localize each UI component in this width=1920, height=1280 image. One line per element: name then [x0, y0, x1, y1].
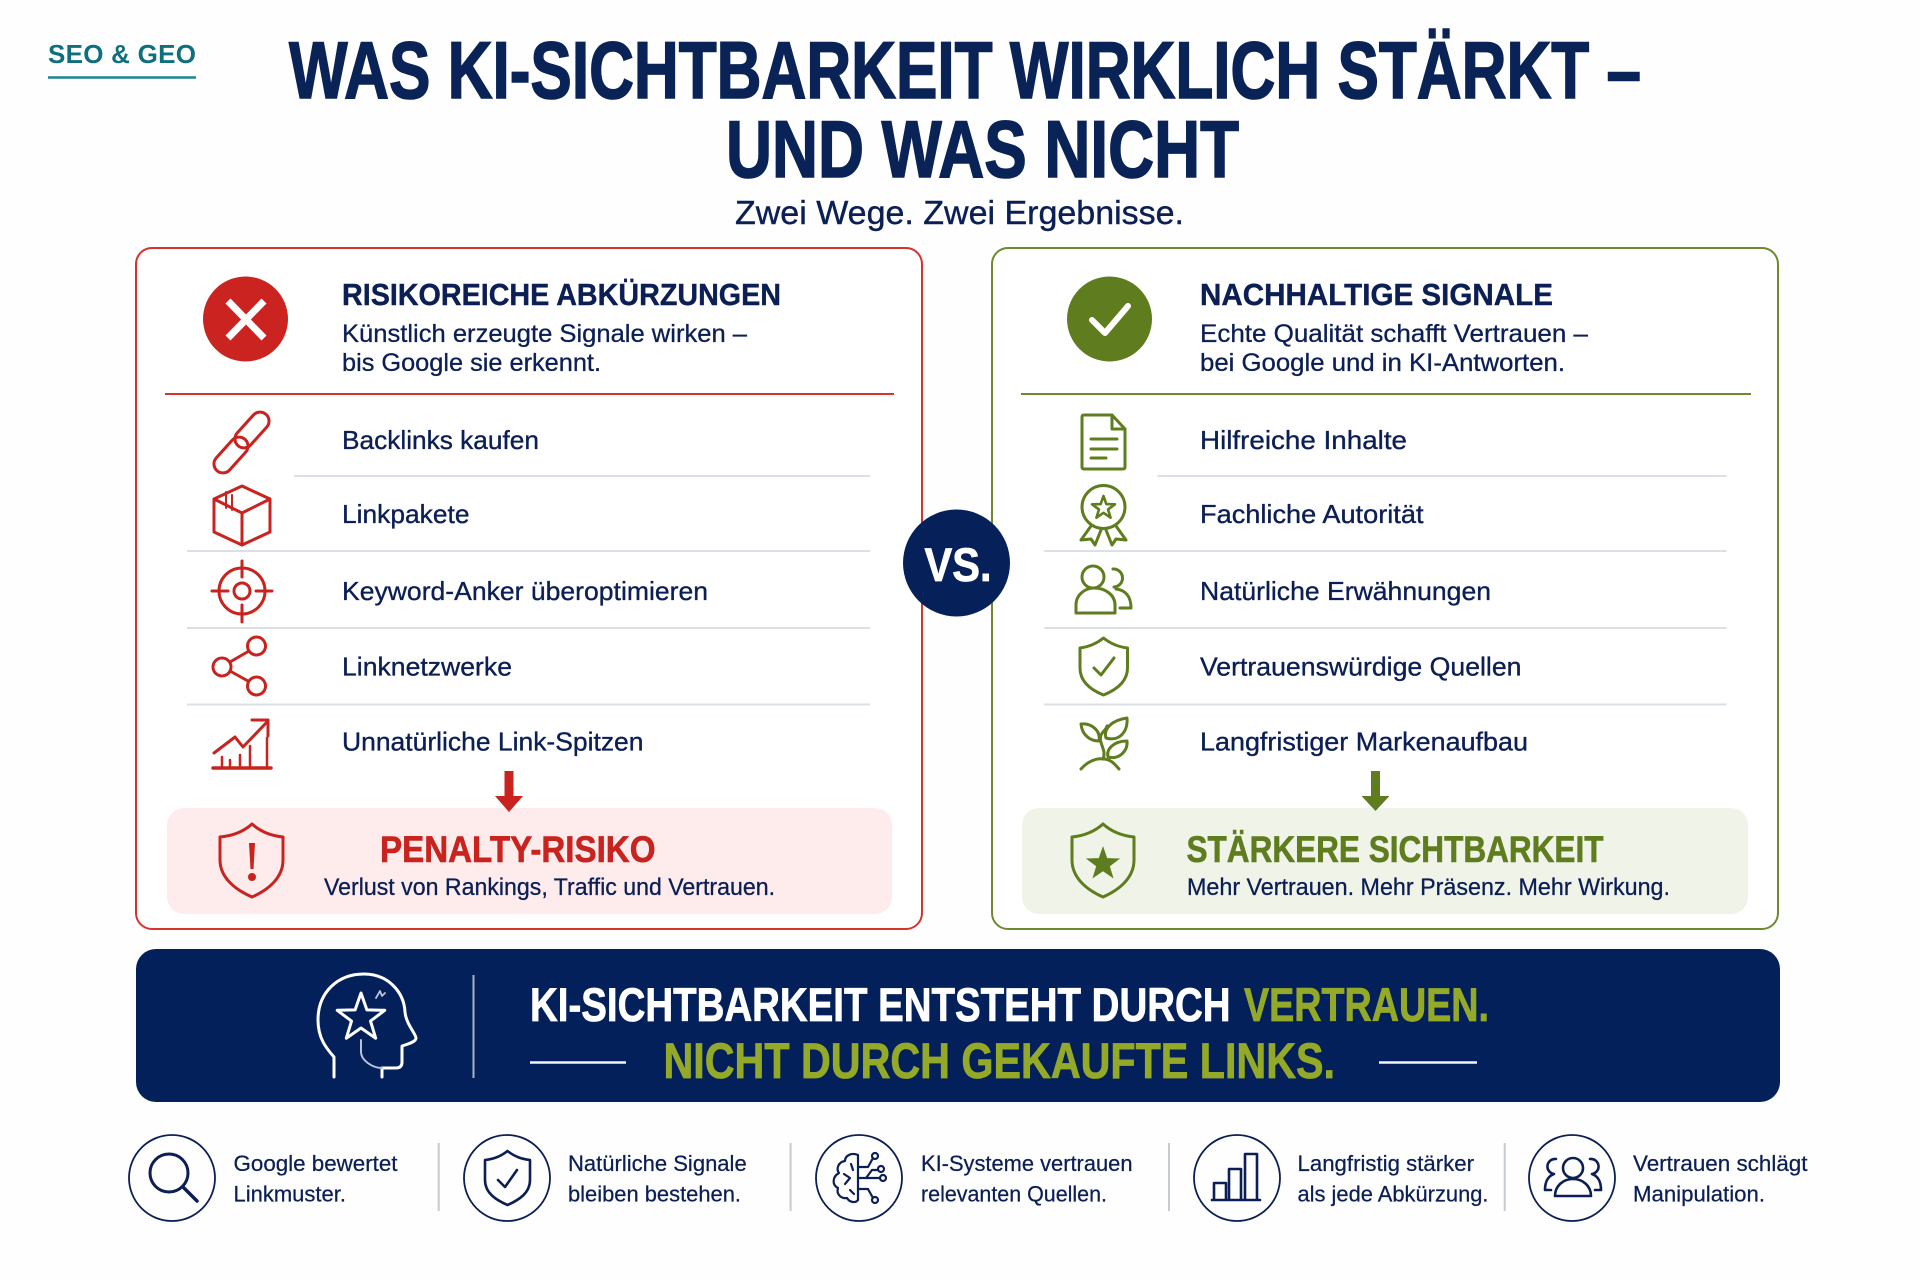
- icon: red cross circle: [203, 276, 288, 362]
- icon: head with star: [318, 974, 416, 1077]
- icon: group of people: [1529, 1135, 1615, 1221]
- takeaway: Langfristig stärker als jede Abkürzung: Langfristig stärker: [1298, 1151, 1474, 1176]
- list item: Langfristiger Markenaufbau: Langfristiger Markenaufbau: [1200, 726, 1528, 756]
- panel description: sustainable signals: bei Google und in KI-Antworten.: [1200, 349, 1565, 377]
- brand tag: SEO & GEO: SEO & GEO: [48, 39, 196, 69]
- icon: spike chart: [213, 720, 271, 768]
- list item: Linkpakete: Linkpakete: [342, 499, 470, 529]
- takeaway: Vertrauen schlägt Manipulation: [1529, 1135, 1808, 1221]
- list item: Keyword-Anker: Keyword-Anker überoptimieren: [342, 576, 708, 606]
- arrow: to stronger visibility: [1362, 771, 1390, 811]
- list item: Fachliche Autorität: Fachliche Autorität: [1200, 499, 1424, 529]
- list item: Backlinks kaufen: Backlinks kaufen: [342, 425, 539, 455]
- panel description: sustainable signals: Echte Qualität schafft Vertrauen –: [1200, 320, 1588, 348]
- badge: VS: VS.: [924, 538, 992, 591]
- panel: sustainable signals: [992, 248, 1778, 929]
- subtitle: Zwei Wege. Zwei Ergebnisse.: [735, 194, 1184, 231]
- banner headline: VERTRAUEN.: [1244, 979, 1489, 1032]
- icon: document: [1082, 415, 1125, 469]
- outcome heading: stronger visibility: STÄRKERE SICHTBARKEIT: [1186, 829, 1604, 870]
- panel heading: sustainable signals: NACHHALTIGE SIGNALE: [1200, 277, 1553, 312]
- takeaway: Natürliche Signale bleiben bestehen: bleiben bestehen.: [568, 1182, 741, 1206]
- outcome text: penalty risk: Verlust von Rankings, Traffic und Vertrauen.: [324, 874, 775, 901]
- takeaway: Google bewertet Linkmuster: Google bewertet: [234, 1151, 398, 1176]
- takeaway: Google bewertet Linkmuster: [129, 1135, 398, 1221]
- outcome text: stronger visibility: Mehr Vertrauen. Mehr Präsenz. Mehr Wirkung.: [1187, 874, 1670, 901]
- takeaway: KI-Systeme vertrauen relevanten Quellen: KI-Systeme vertrauen: [921, 1151, 1132, 1176]
- list item: Natürliche Erwähnungen: Natürliche Erwähnungen: [1200, 576, 1491, 606]
- icon: box: [214, 486, 270, 545]
- panel heading: risky shortcuts: RISIKOREICHE ABKÜRZUNGEN: [342, 277, 781, 312]
- arrow: to penalty risk: [495, 771, 523, 812]
- icon: bar chart: [1194, 1135, 1280, 1221]
- icon: warning shield: [220, 824, 283, 897]
- icon: AI brain: [816, 1135, 902, 1221]
- icon: green check circle: [1067, 276, 1152, 362]
- badge: VS: [903, 510, 1010, 616]
- takeaway: KI-Systeme vertrauen relevanten Quellen: [816, 1135, 1132, 1221]
- icon: shield check: [464, 1135, 550, 1221]
- outcome box: stronger visibility: [1022, 808, 1748, 914]
- banner headline: NICHT DURCH GEKAUFTE LINKS.: [664, 1033, 1335, 1089]
- icon: people: [1076, 566, 1131, 613]
- list item: Vertrauenswürdige Quellen: Vertrauenswürdige Quellen: [1200, 652, 1522, 682]
- takeaway: Langfristig stärker als jede Abkürzung: als jede Abkürzung.: [1298, 1182, 1488, 1206]
- panel description: risky shortcuts: bis Google sie erkennt.: [342, 349, 601, 377]
- banner headline: KI-SICHTBARKEIT ENTSTEHT DURCH: [530, 979, 1230, 1032]
- banner headline: [530, 979, 1489, 1089]
- panel description: risky shortcuts: Künstlich erzeugte Signale wirken –: [342, 320, 747, 348]
- takeaway: Vertrauen schlägt Manipulation: Vertrauen schlägt: [1633, 1151, 1808, 1176]
- takeaway: Natürliche Signale bleiben bestehen: Natürliche Signale: [568, 1151, 747, 1176]
- icon: plant: [1081, 718, 1127, 769]
- banner: key message: [136, 949, 1780, 1102]
- takeaway: Langfristig stärker als jede Abkürzung: [1194, 1135, 1488, 1221]
- icon: share network: [213, 637, 266, 695]
- icon: shield check: [1080, 638, 1128, 695]
- icon: target: [212, 561, 272, 622]
- outcome box: penalty risk: [167, 808, 892, 914]
- list item: Unnatürliche Link-Spitzen: Unnatürliche Link-Spitzen: [342, 726, 644, 756]
- title: [289, 26, 1641, 195]
- icon: star shield: [1072, 824, 1134, 897]
- takeaway: KI-Systeme vertrauen relevanten Quellen: relevanten Quellen.: [921, 1182, 1107, 1206]
- outcome heading: penalty risk: PENALTY-RISIKO: [380, 829, 656, 870]
- title: UND WAS NICHT: [726, 105, 1239, 195]
- list item: Hilfreiche Inhalte: Hilfreiche Inhalte: [1200, 425, 1407, 455]
- takeaway: Google bewertet Linkmuster: Linkmuster.: [234, 1182, 346, 1206]
- panel description: risky shortcuts: [342, 320, 747, 377]
- icon: medal: [1081, 486, 1126, 545]
- panel: risky shortcuts: [136, 248, 922, 929]
- panel description: sustainable signals: [1200, 320, 1588, 377]
- icon: magnifier: [129, 1135, 215, 1221]
- takeaway: Natürliche Signale bleiben bestehen: [464, 1135, 747, 1221]
- icon: chain link: [210, 408, 273, 477]
- list item: Linknetzwerke: Linknetzwerke: [342, 652, 512, 682]
- takeaway: Vertrauen schlägt Manipulation: Manipulation.: [1633, 1182, 1765, 1206]
